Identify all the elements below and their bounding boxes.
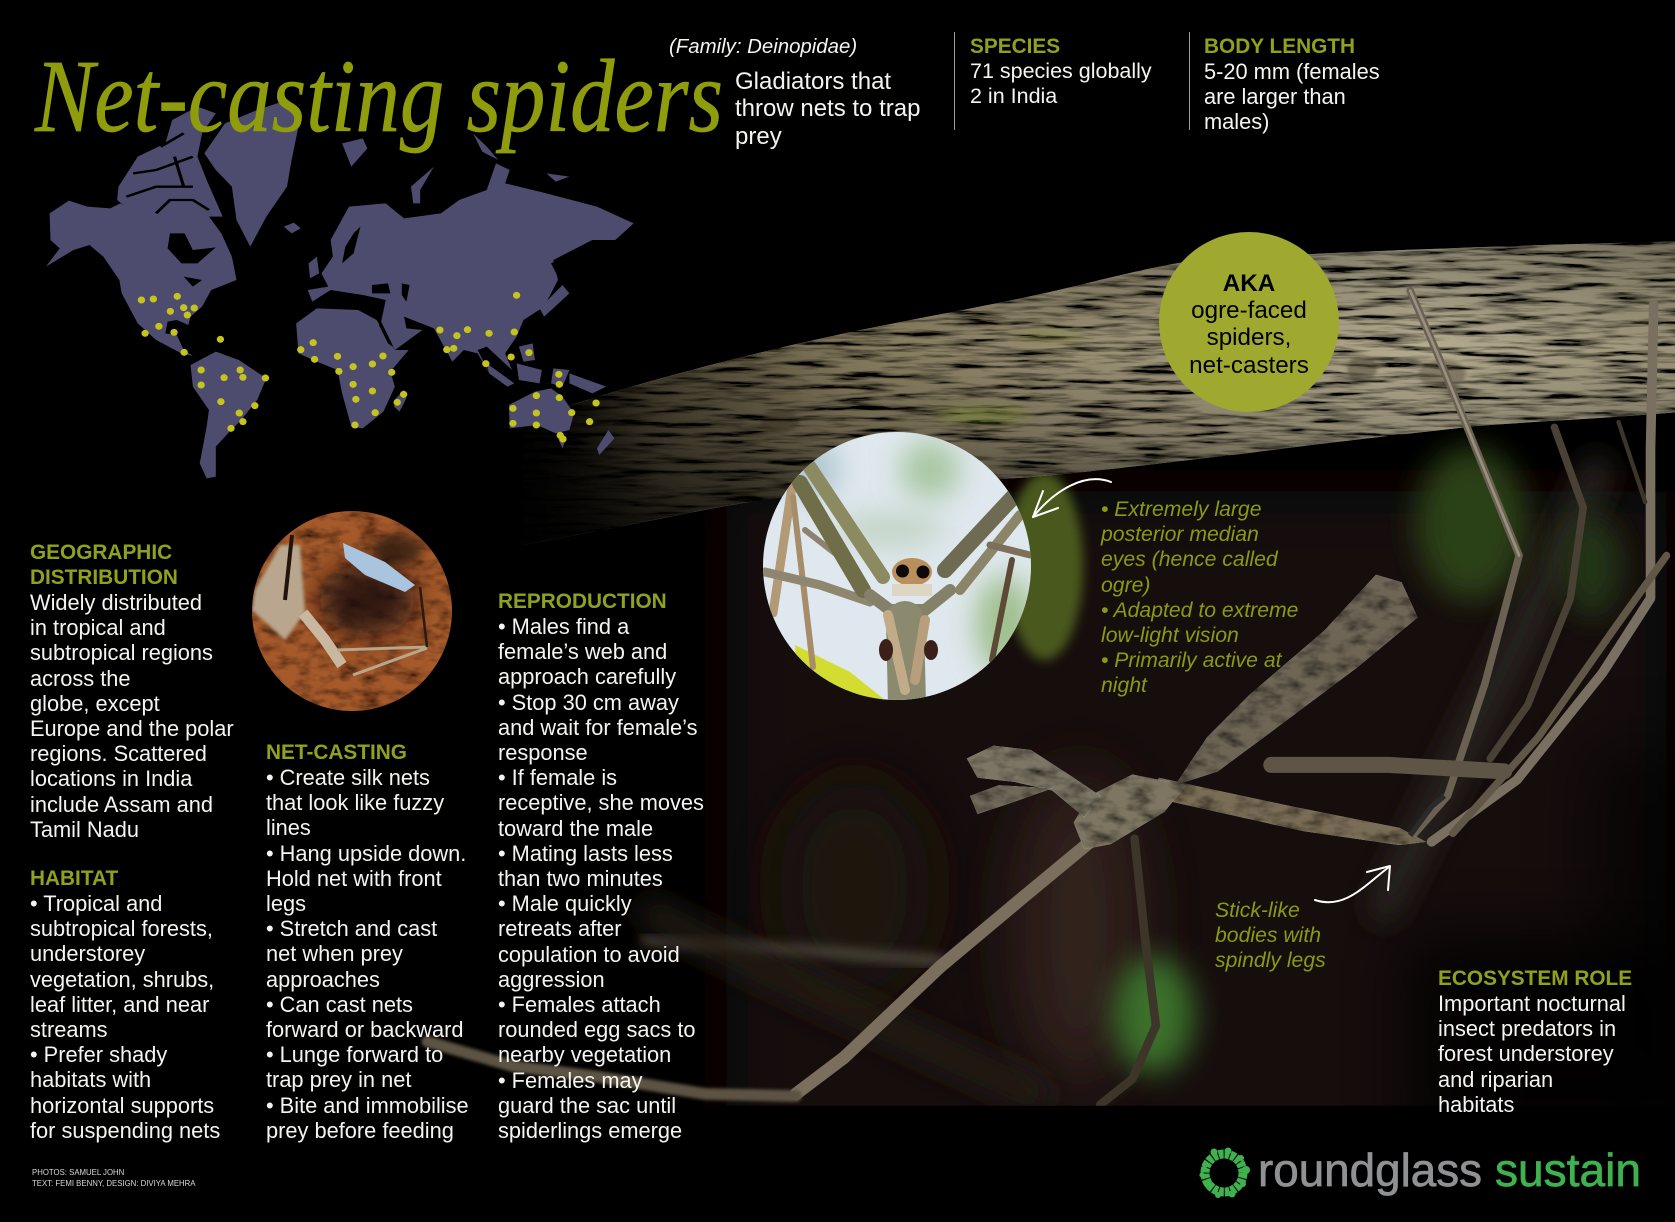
credits: PHOTOS: SAMUEL JOHN: [32, 1168, 124, 1177]
photo: close-up of spider face: [763, 432, 1031, 700]
habitat text: subtropical forests,: [30, 916, 213, 941]
panel: habitat: [30, 867, 220, 1143]
net-casting heading: NET-CASTING: [266, 741, 407, 764]
reproduction text: nearby vegetation: [498, 1042, 671, 1067]
annotation: eye facts: low-light vision: [1101, 624, 1239, 647]
net-casting text: • Bite and immobilise: [266, 1093, 469, 1118]
net-casting text: prey before feeding: [266, 1118, 454, 1143]
annotation: stick-like bodies: [1215, 899, 1326, 972]
net-casting text: net when prey: [266, 941, 403, 966]
body length text: 5-20 mm (females: [1204, 59, 1380, 84]
panel: ecosystem role: [1438, 967, 1632, 1117]
logo wordmark: sustain: [1495, 1144, 1641, 1196]
geographic text: Europe and the polar: [30, 716, 234, 741]
map inland seas and lakes: [168, 227, 588, 347]
reproduction text: retreats after: [498, 916, 622, 941]
bark branch: [524, 242, 1675, 545]
reproduction text: • Females attach: [498, 992, 661, 1017]
reproduction text: toward the male: [498, 816, 653, 841]
panel: net-casting: [266, 741, 469, 1143]
photo: spider with net on orange ground: [252, 511, 452, 711]
habitat heading: HABITAT: [30, 867, 118, 890]
spider: lower legs: [427, 765, 1504, 1105]
reproduction text: copulation to avoid: [498, 942, 680, 967]
ecosystem text: and riparian: [1438, 1067, 1553, 1092]
ecosystem heading: ECOSYSTEM ROLE: [1438, 967, 1632, 990]
annotation: eye facts: eyes (hence called: [1101, 548, 1278, 571]
logo wordmark: roundglass: [1258, 1144, 1482, 1196]
reproduction text: • Females may: [498, 1068, 643, 1093]
net-casting text: forward or backward: [266, 1017, 463, 1042]
reproduction text: guard the sac until: [498, 1093, 676, 1118]
map location dots: [138, 292, 600, 442]
map landmasses: [46, 100, 634, 478]
net-casting text: • Create silk nets: [266, 765, 430, 790]
net-casting text: • Hang upside down.: [266, 841, 466, 866]
panel: reproduction: [498, 590, 704, 1143]
annotation: eye facts: [1100, 498, 1298, 697]
geographic text: include Assam and: [30, 792, 213, 817]
reproduction text: [498, 614, 704, 1143]
map arctic channels: [126, 133, 209, 213]
body length text: [1204, 59, 1380, 134]
body length text: are larger than: [1204, 84, 1346, 109]
species stat: [954, 32, 1155, 130]
net-casting text: trap prey in net: [266, 1067, 411, 1092]
panel: geographic distribution: [30, 541, 234, 842]
species heading: SPECIES: [970, 35, 1060, 58]
spider: body and front legs: [967, 575, 1444, 849]
annotation: stick-like bodies: Stick-like: [1215, 899, 1300, 922]
habitat text: vegetation, shrubs,: [30, 967, 214, 992]
ecosystem text: forest understorey: [1438, 1041, 1614, 1066]
geographic text: locations in India: [30, 766, 192, 791]
habitat text: [30, 891, 220, 1143]
habitat text: for suspending nets: [30, 1118, 220, 1143]
geographic text: regions. Scattered: [30, 741, 207, 766]
reproduction text: • Males find a: [498, 614, 629, 639]
net-casting text: lines: [266, 815, 311, 840]
ecosystem text: [1438, 991, 1626, 1117]
credits: [32, 1168, 196, 1188]
body length heading: BODY LENGTH: [1204, 35, 1355, 58]
net-casting text: • Lunge forward to: [266, 1042, 443, 1067]
annotation: eye facts: • Adapted to extreme: [1101, 599, 1298, 622]
title: Net-casting spiders: [34, 39, 723, 154]
geographic text: globe, except: [30, 691, 160, 716]
annotation: eye facts: posterior median: [1101, 523, 1259, 546]
geographic text: [30, 590, 234, 842]
net-casting text: approaches: [266, 967, 380, 992]
geographic heading: GEOGRAPHIC: [30, 541, 172, 564]
species text: 2 in India: [970, 84, 1057, 108]
habitat text: horizontal supports: [30, 1093, 214, 1118]
reproduction text: spiderlings emerge: [498, 1118, 682, 1143]
callout circle: also known as: net-casters: [1189, 352, 1309, 379]
reproduction text: response: [498, 740, 588, 765]
habitat text: habitats with: [30, 1067, 151, 1092]
species text: 71 species globally: [970, 59, 1152, 83]
reproduction text: female’s web and: [498, 639, 667, 664]
callout circle: also known as: [1159, 232, 1339, 412]
reproduction heading: REPRODUCTION: [498, 590, 667, 613]
ecosystem text: habitats: [1438, 1092, 1514, 1117]
habitat text: • Tropical and: [30, 891, 162, 916]
reproduction text: • Male quickly: [498, 891, 632, 916]
reproduction text: • If female is: [498, 765, 617, 790]
callout circle: also known as: AKA: [1223, 270, 1275, 297]
reproduction text: rounded egg sacs to: [498, 1017, 696, 1042]
reproduction text: approach carefully: [498, 664, 676, 689]
species text: [970, 59, 1152, 108]
geographic text: across the: [30, 666, 131, 691]
photo: spider on a branch with blurred forest background: [420, 242, 1675, 1106]
callout circle: also known as: spiders,: [1207, 324, 1291, 351]
net-casting text: • Stretch and cast: [266, 916, 437, 941]
credits: TEXT: FEMI BENNY, DESIGN: DIVIYA MEHRA: [32, 1178, 195, 1188]
callout circle: also known as: ogre-faced: [1191, 297, 1307, 324]
body length stat: [1189, 32, 1400, 130]
spider: thin upper legs: [1410, 291, 1667, 842]
annotation: eye facts: ogre): [1101, 574, 1150, 597]
net-casting text: • Can cast nets: [266, 992, 413, 1017]
family name: (Family: Deinopidae): [669, 36, 857, 58]
geographic heading: DISTRIBUTION: [30, 566, 178, 589]
net-casting text: [266, 765, 469, 1143]
geographic heading: [30, 541, 178, 589]
annotation: eye facts: • Primarily active at: [1101, 649, 1282, 672]
geographic text: Tamil Nadu: [30, 817, 139, 842]
habitat text: • Prefer shady: [30, 1042, 167, 1067]
reproduction text: • Mating lasts less: [498, 841, 673, 866]
geographic text: Widely distributed: [30, 590, 202, 615]
ecosystem text: Important nocturnal: [1438, 991, 1626, 1016]
annotation: eye facts: night: [1101, 674, 1147, 697]
net-casting text: legs: [266, 891, 306, 916]
body length text: males): [1204, 109, 1269, 134]
annotation: stick-like bodies: spindly legs: [1215, 949, 1326, 972]
reproduction text: aggression: [498, 967, 605, 992]
habitat text: understorey: [30, 941, 145, 966]
geographic text: in tropical and: [30, 615, 166, 640]
net-casting text: that look like fuzzy: [266, 790, 444, 815]
reproduction text: • Stop 30 cm away: [498, 690, 679, 715]
blurred background: [641, 447, 1675, 1175]
habitat text: leaf litter, and near: [30, 992, 209, 1017]
ecosystem text: insect predators in: [1438, 1016, 1616, 1041]
annotation: eye facts: • Extremely large: [1101, 498, 1262, 521]
geographic text: subtropical regions: [30, 640, 213, 665]
tagline: [735, 68, 920, 150]
reproduction text: than two minutes: [498, 866, 663, 891]
reproduction text: receptive, she moves: [498, 790, 704, 815]
habitat text: streams: [30, 1017, 108, 1042]
tagline: Gladiators that: [735, 68, 891, 95]
annotation: stick-like bodies: bodies with: [1215, 924, 1321, 947]
reproduction text: and wait for female’s: [498, 715, 698, 740]
tagline: throw nets to trap: [735, 95, 920, 122]
net-casting text: Hold net with front: [266, 866, 442, 891]
logo ring: [1199, 1148, 1250, 1198]
tagline: prey: [735, 123, 782, 150]
